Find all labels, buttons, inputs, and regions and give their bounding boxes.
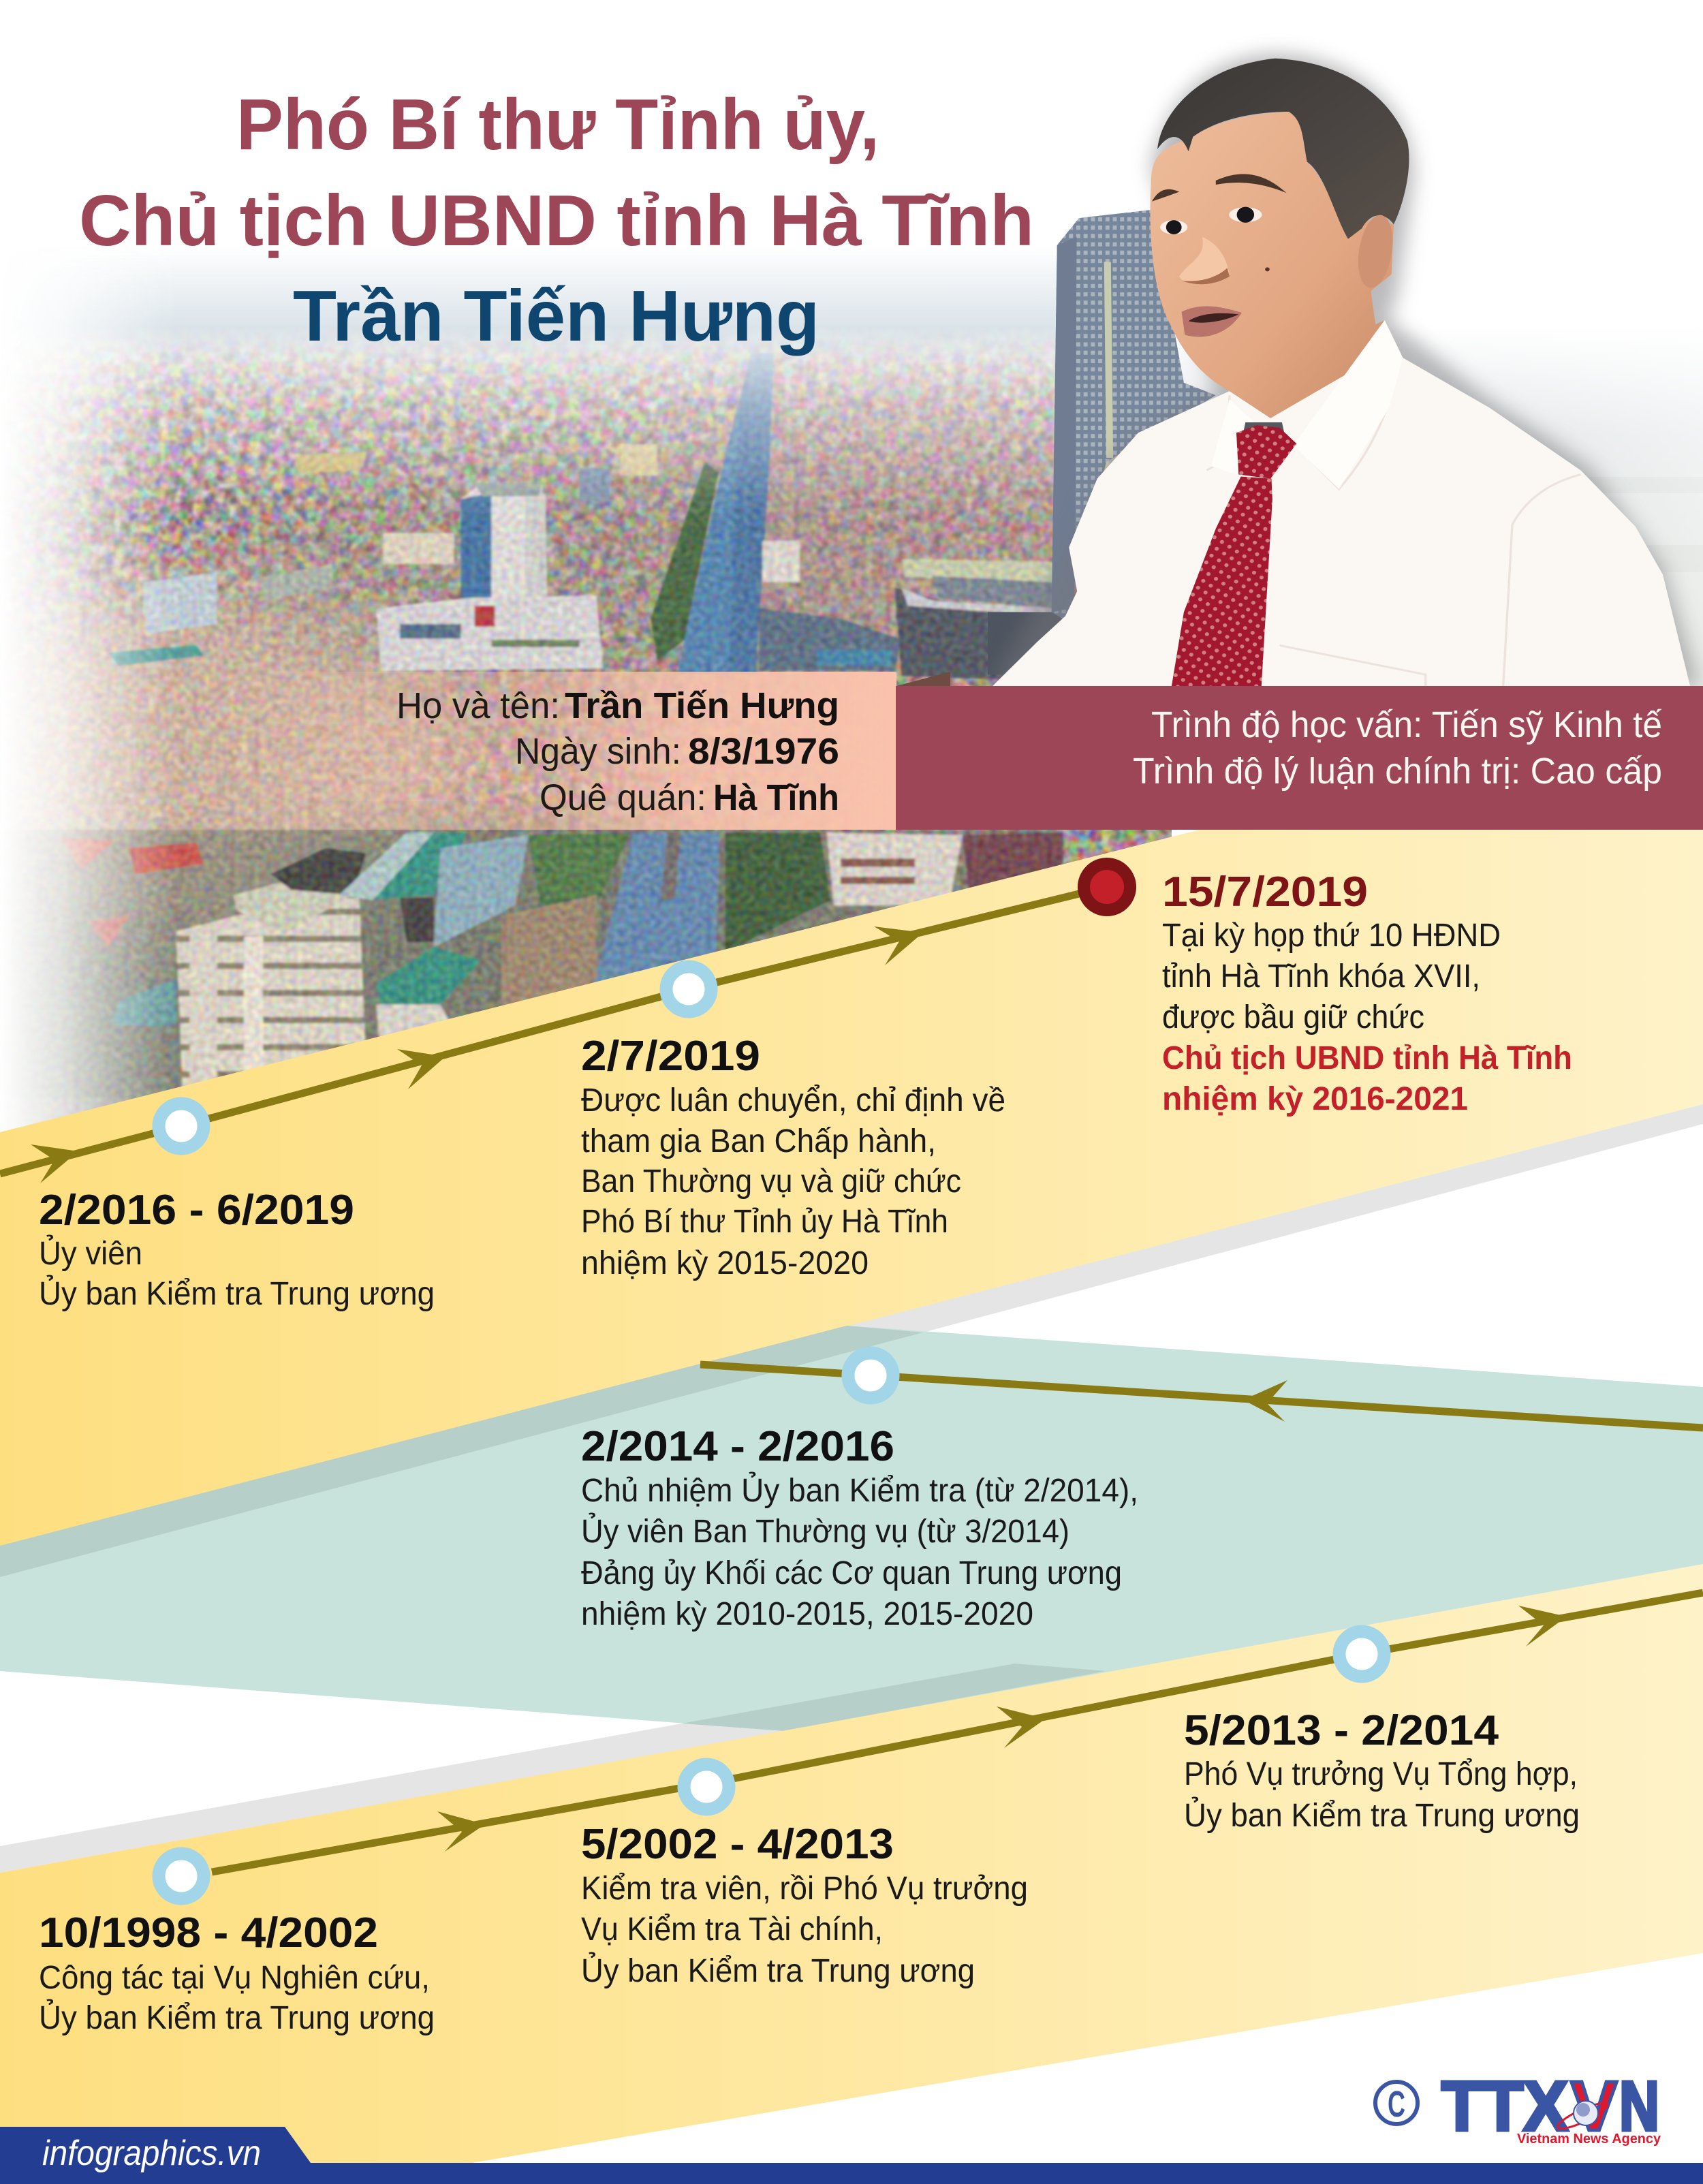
entry: 15/7/2019: được bầu giữ chức xyxy=(1162,999,1424,1035)
tall hotel tower xyxy=(459,482,549,599)
footer bar: infographics.vn xyxy=(42,2134,261,2173)
entry: 2/2014 - 2/2016: Chủ nhiệm Ủy ban Kiểm tra (từ 2/2014), xyxy=(581,1471,1138,1509)
entry: 5/2002 - 4/2013 xyxy=(581,1821,1028,1989)
footer bar xyxy=(0,2127,1703,2184)
neck and face xyxy=(1151,112,1394,418)
grey strip below upper band xyxy=(0,1104,1703,1577)
entry: 10/1998 - 4/2002: Ủy ban Kiểm tra Trung ương xyxy=(39,1999,435,2036)
boulevard xyxy=(651,353,774,674)
timeline path: lower xyxy=(212,1593,1703,1872)
title: Chủ tịch UBND tỉnh Hà Tĩnh xyxy=(79,181,1034,261)
TTXVN logo xyxy=(1441,2067,1661,2147)
entry: 10/1998 - 4/2002: 10/1998 - 4/2002 xyxy=(39,1909,378,1956)
entry: 2/7/2019: Được luân chuyển, chỉ định về xyxy=(581,1082,1005,1119)
title: Trần Tiến Hưng xyxy=(293,276,819,356)
entry: 2/2016 - 6/2019: 2/2016 - 6/2019 xyxy=(39,1187,354,1234)
entry: 2/2014 - 2/2016: nhiệm kỳ 2010-2015, 2015-2020 xyxy=(581,1596,1033,1632)
entry: 2/2014 - 2/2016: Đảng ủy Khối các Cơ quan Trung ương xyxy=(581,1555,1122,1591)
copyright mark xyxy=(1375,2082,1418,2125)
entry: 2/7/2019: Phó Bí thư Tỉnh ủy Hà Tĩnh xyxy=(581,1204,948,1240)
photo: distant landscape behind the portrait xyxy=(1158,293,1703,688)
entry: 2/2016 - 6/2019: Ủy viên xyxy=(39,1234,142,1272)
entry: 15/7/2019: Chủ tịch UBND tỉnh Hà Tĩnh xyxy=(1162,1040,1572,1076)
entry: 2/2014 - 2/2016 xyxy=(581,1423,1138,1632)
entry: 5/2002 - 4/2013: Ủy ban Kiểm tra Trung ương xyxy=(581,1952,975,1989)
globe icon xyxy=(1555,2099,1610,2133)
entry: 15/7/2019: 15/7/2019 xyxy=(1162,869,1368,916)
small blocks xyxy=(108,444,800,666)
yellow band: upper timeline xyxy=(0,830,1703,1547)
photo: aerial view of the city xyxy=(12,332,1172,1128)
shirt folds xyxy=(1206,366,1580,686)
entry: 5/2013 - 2/2014: Ủy ban Kiểm tra Trung ương xyxy=(1184,1796,1580,1834)
soft shadow xyxy=(993,53,1700,686)
maroon education panel: Trình độ lý luận chính trị: Cao cấp xyxy=(1133,751,1662,792)
maroon education panel xyxy=(896,686,1703,830)
entry: 2/7/2019: tham gia Ban Chấp hành, xyxy=(581,1123,936,1159)
TTXVN logo: Vietnam News Agency xyxy=(1517,2132,1661,2147)
entry: 10/1998 - 4/2002 xyxy=(39,1909,435,2036)
title xyxy=(79,84,1034,356)
entry: 15/7/2019: Tại kỳ họp thứ 10 HĐND xyxy=(1162,918,1501,954)
entry: 2/2016 - 6/2019: Ủy ban Kiểm tra Trung ương xyxy=(39,1275,435,1312)
copyright mark: C xyxy=(1388,2084,1405,2125)
lower buildings xyxy=(0,830,1063,1098)
ear xyxy=(1354,213,1397,290)
entry: 2/7/2019 xyxy=(581,1033,1005,1281)
TTXVN logo: N xyxy=(1619,2067,1659,2145)
darker overlap strip near lower band xyxy=(682,1664,1106,1731)
peach personal info panel xyxy=(204,672,950,830)
entry: 10/1998 - 4/2002: Công tác tại Vụ Nghiên cứu, xyxy=(39,1960,430,1996)
marker: 2/2016 xyxy=(159,1104,204,1149)
personal info text xyxy=(396,685,839,818)
necktie xyxy=(1172,425,1296,686)
entry: 15/7/2019: tỉnh Hà Tĩnh khóa XVII, xyxy=(1162,958,1480,995)
TTXVN logo: TTX xyxy=(1441,2067,1568,2145)
personal info text: Trần Tiến Hưng xyxy=(565,685,839,726)
timeline path: middle xyxy=(700,1364,1703,1428)
entry: 5/2013 - 2/2014 xyxy=(1184,1707,1580,1834)
TTXVN logo: V xyxy=(1571,2067,1617,2145)
personal info text: Quê quán: xyxy=(540,777,706,818)
portrait of Trần Tiến Hưng xyxy=(988,53,1700,686)
entry: 5/2002 - 4/2013: Kiểm tra viên, rồi Phó Vụ trưởng xyxy=(581,1871,1028,1907)
marker: 2/2014 xyxy=(848,1353,893,1398)
timeline path: upper xyxy=(0,887,1107,1183)
stadium complex xyxy=(759,559,1057,681)
marker: 5/2013 xyxy=(1339,1632,1384,1676)
teal band: middle timeline xyxy=(0,1326,1703,1731)
personal info text: Hà Tĩnh xyxy=(713,777,839,818)
entry: 2/7/2019: 2/7/2019 xyxy=(581,1033,760,1080)
darker overlap strip on teal xyxy=(0,1326,923,1577)
entry: 2/7/2019: nhiệm kỳ 2015-2020 xyxy=(581,1245,869,1281)
marker: 15/7/2019 xyxy=(1084,864,1130,910)
entry: 5/2013 - 2/2014: 5/2013 - 2/2014 xyxy=(1184,1707,1499,1754)
entry: 15/7/2019: nhiệm kỳ 2016-2021 xyxy=(1162,1081,1468,1117)
marker: 2/7/2019 xyxy=(666,967,711,1012)
entry: 5/2013 - 2/2014: Phó Vụ trưởng Vụ Tổng hợp, xyxy=(1184,1756,1578,1792)
entry: 2/2014 - 2/2016: Ủy viên Ban Thường vụ (từ 3/2014) xyxy=(581,1512,1069,1550)
entry: 5/2002 - 4/2013: 5/2002 - 4/2013 xyxy=(581,1821,894,1868)
photo fades xyxy=(0,245,1172,1233)
city detail: main boulevard and buildings xyxy=(0,353,1063,1098)
facial features xyxy=(1152,174,1287,337)
fold triangle xyxy=(896,672,950,686)
entry: 2/7/2019: Ban Thường vụ và giữ chức xyxy=(581,1164,961,1200)
yellow band: lower timeline xyxy=(0,1564,1703,2163)
entry: 15/7/2019 xyxy=(1162,869,1572,1117)
entry: 2/2014 - 2/2016: 2/2014 - 2/2016 xyxy=(581,1423,894,1470)
entry: 5/2002 - 4/2013: Vụ Kiểm tra Tài chính, xyxy=(581,1912,883,1948)
personal info text: Họ và tên: xyxy=(396,685,560,726)
background tower xyxy=(988,210,1216,674)
personal info text: Ngày sinh: xyxy=(515,731,681,772)
hair xyxy=(1157,59,1409,239)
marker: 5/2002 xyxy=(684,1764,729,1809)
hotel podium xyxy=(376,595,604,671)
shirt xyxy=(993,320,1690,686)
collar xyxy=(1211,320,1403,489)
marker: 10/1998 xyxy=(159,1854,204,1899)
maroon education panel: Trình độ học vấn: Tiến sỹ Kinh tế xyxy=(1151,704,1662,745)
title: Phó Bí thư Tỉnh ủy, xyxy=(236,84,879,165)
grey strip above lower band xyxy=(0,1723,784,1873)
entry: 2/2016 - 6/2019 xyxy=(39,1187,435,1312)
personal info text: 8/3/1976 xyxy=(688,731,839,772)
